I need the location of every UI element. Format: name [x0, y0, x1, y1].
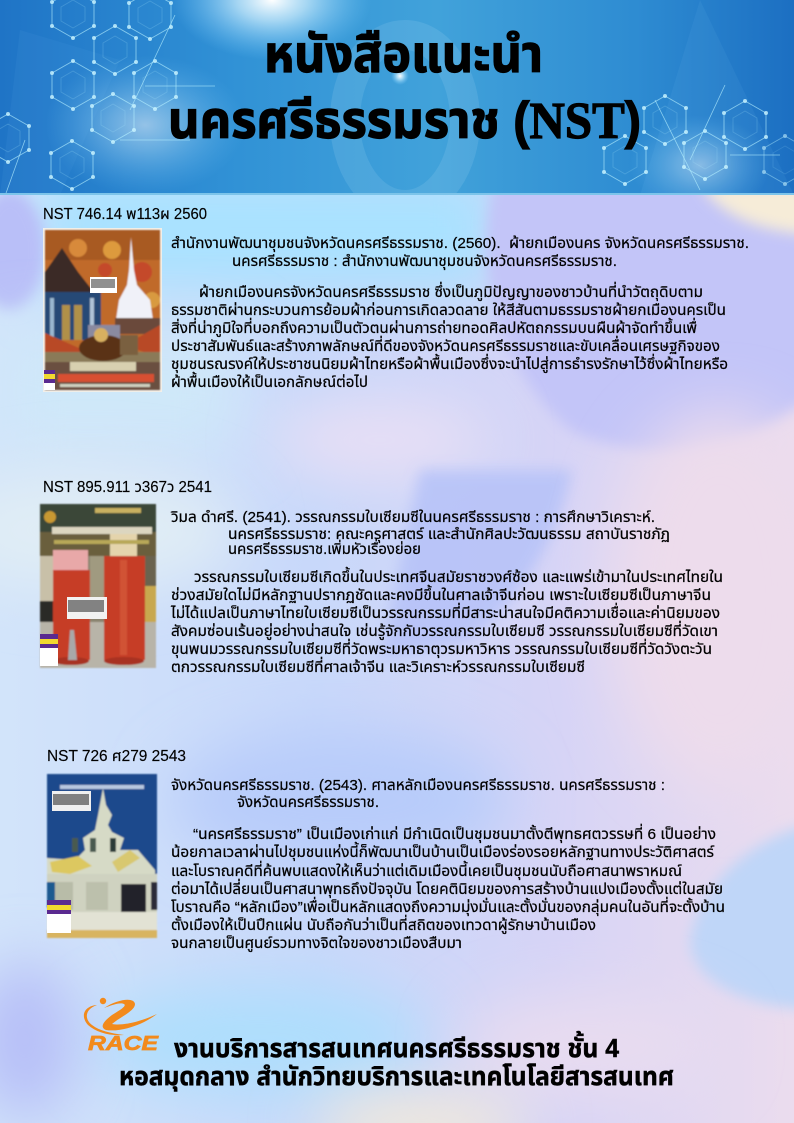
citation 3: จังหวัดนครศรีธรรมราช. [237, 794, 379, 811]
abstract 1: สิ่งที่น่าภูมิใจที่บอกถึงความเป็นตัวตนผ่านการถ่ายทอดศิลปหัตถกรรมบนผืนผ้าจัดทำขึ้นเพื่ [171, 317, 697, 337]
panel: book 3 [47, 748, 725, 952]
panel: book 1 [43, 206, 749, 392]
abstract 2: ช่วงสมัยใดไม่มีหลักฐานปรากฏชัดและคงมีขึ้นในศาลเจ้าจีนก่อน เพราะใบเซียมซีเป็นภาษาจีน [171, 584, 711, 604]
abstract 2: ตกวรรณกรรมใบเซียมซีที่ศาลเจ้าจีน และวิเคราะห์วรรณกรรมใบเซียมซี [171, 656, 585, 676]
abstract 1: ธรรมชาติผ่านกระบวนการย้อมผ้าก่อนการเกิดลวดลาย ให้สีสันตามธรรมราชผ้ายกเมืองนครเป็น [171, 301, 726, 319]
citation 3: จังหวัดนครศรีธรรมราช. (2543). ศาลหลักเมืองนครศรีธรรมราช. นครศรีธรรมราช : [171, 777, 665, 794]
abstract 1: ผ้าพื้นเมืองให้เป็นเอกลักษณ์ต่อไป [171, 371, 368, 391]
header banner [0, 0, 794, 215]
panel: book 2 [40, 479, 723, 676]
abstract 2: วรรณกรรมใบเซียมซีเกิดขึ้นในประเทศจีนสมัยราชวงศ์ซ้อง และแพร่เข้ามาในประเทศไทยใน [194, 566, 723, 586]
abstract 3: และโบราณคดีที่ค้นพบแสดงให้เห็นว่าแต่เดิมเมืองนี้เคยเป็นชุมชนนับถือศาสนาพราหมณ์ [171, 860, 682, 880]
book cover 3 [47, 774, 157, 938]
logo: RACE: RACE [88, 1033, 159, 1055]
citation 1: สำนักงานพัฒนาชุมชนจังหวัดนครศรีธรรมราช. (2560). ผ้ายกเมืองนคร จังหวัดนครศรีธรรมราช. [171, 235, 749, 252]
citation 2: นครศรีธรรมราช: คณะครุศาสตร์ และสำนักศิลปะวัฒนธรรม สถาบันราชภัฏ [228, 526, 670, 543]
logo: RACE [84, 998, 159, 1055]
citation 2: นครศรีธรรมราช.เพิ่มหัวเรื่องย่อย [228, 538, 421, 558]
citation 2: วิมล ดำศรี. (2541). วรรณกรรมใบเซียมซีในนครศรีธรรมราช : การศึกษาวิเคราะห์. [171, 509, 655, 526]
title [168, 26, 641, 150]
citation 3 [171, 777, 665, 811]
abstract 3: จนกลายเป็นศูนย์รวมทางจิตใจของชาวเมืองสืบมา [171, 935, 462, 952]
hexagon network right [602, 85, 794, 190]
footer text: หอสมุดกลาง สำนักวิทยบริการและเทคโนโลยีสารสนเทศ [119, 1061, 674, 1092]
citation 1 [171, 235, 749, 270]
abstract 3 [171, 823, 725, 952]
abstract 1: ชุมชนรณรงค์ให้ประชาชนนิยมผ้าไทยหรือผ้าพื้นเมืองซึ่งจะนำไปสู่การธำรงรักษาไว้ซึ่งผ้าไทยหรือ [171, 353, 728, 373]
abstract 3: “นครศรีธรรมราช” เป็นเมืองเก่าแก่ มีกำเนิดเป็นชุมชนมาตั้งตีพุทธศตวรรษที่ 6 เป็นอย่าง [193, 823, 716, 843]
hexagon network left [0, 0, 215, 210]
title: หนังสือแนะนำ [264, 26, 543, 84]
abstract 2 [170, 566, 723, 676]
abstract 3: ตั้งเมืองให้เป็นปึกแผ่น นับถือกันว่าเป็นที่สถิตของเทวดาผู้รักษาบ้านเมือง [171, 914, 596, 934]
footer text: งานบริการสารสนเทศนครศรีธรรมราช ชั้น 4 [174, 1031, 620, 1063]
abstract 3: โบราณคือ “หลักเมือง”เพื่อเป็นหลักแสดงถึงความมุ่งมั่นและตั้งมั่นของกลุ่มคนในอันที่จะตั้งบ้าน [171, 896, 725, 916]
call number 2: NST 895.911 ว367ว 2541 [43, 479, 212, 496]
abstract 3: ต่อมาได้เปลี่ยนเป็นศาสนาพุทธถึงปัจจุบัน โดยคตินิยมของการสร้างบ้านแปงเมืองตั้งแต่ในสมัย [171, 878, 723, 898]
call number 1: NST 746.14 พ113ผ 2560 [43, 206, 207, 223]
book cover 2 [40, 504, 156, 668]
abstract 2: ขุนพนมวรรณกรรมใบเซียมซีที่วัดพระมหาธาตุวรมหาวิหาร วรรณกรรมใบเซียมซีที่วัดวังตะวัน [171, 638, 712, 658]
book cover 1 [43, 228, 162, 392]
citation 2 [171, 509, 670, 558]
abstract 1: ผ้ายกเมืองนครจังหวัดนครศรีธรรมราช ซึ่งเป็นภูมิปัญญาของชาวบ้านที่นำวัตถุดิบตาม [199, 281, 703, 301]
abstract 2: สังคมซ่อนเร้นอยู่อย่างน่าสนใจ เช่นรู้จักกับวรรณกรรมใบเซียมซี วรรณกรรมใบเซียมซีที่วัดเขา [171, 620, 718, 640]
call number 3: NST 726 ศ279 2543 [47, 748, 186, 765]
abstract 1 [171, 281, 728, 391]
title: นครศรีธรรมราช (NST) [168, 92, 641, 150]
abstract 1: ประชาสัมพันธ์และสร้างภาพลักษณ์ที่ดีของจังหวัดนครศรีธรรมราชและขับเคลื่อนเศรษฐกิจของ [171, 335, 720, 355]
citation 1: นครศรีธรรมราช : สำนักงานพัฒนาชุมชนจังหวัดนครศรีธรรมราช. [232, 253, 617, 270]
abstract 2: ไม่ได้แปลเป็นภาษาไทยใบเซียมซีเป็นวรรณกรรมที่มีสาระน่าสนใจมีคติความเชื่อและค่านิยมของ [170, 602, 720, 622]
abstract 3: น้อยกาลเวลาผ่านไปชุมชนแห่งนี้ก็พัฒนาเป็นบ้านเป็นเมืองร่องรอยหลักฐานทางประวัติศาสตร์ [171, 841, 715, 861]
footer text [119, 1031, 674, 1092]
